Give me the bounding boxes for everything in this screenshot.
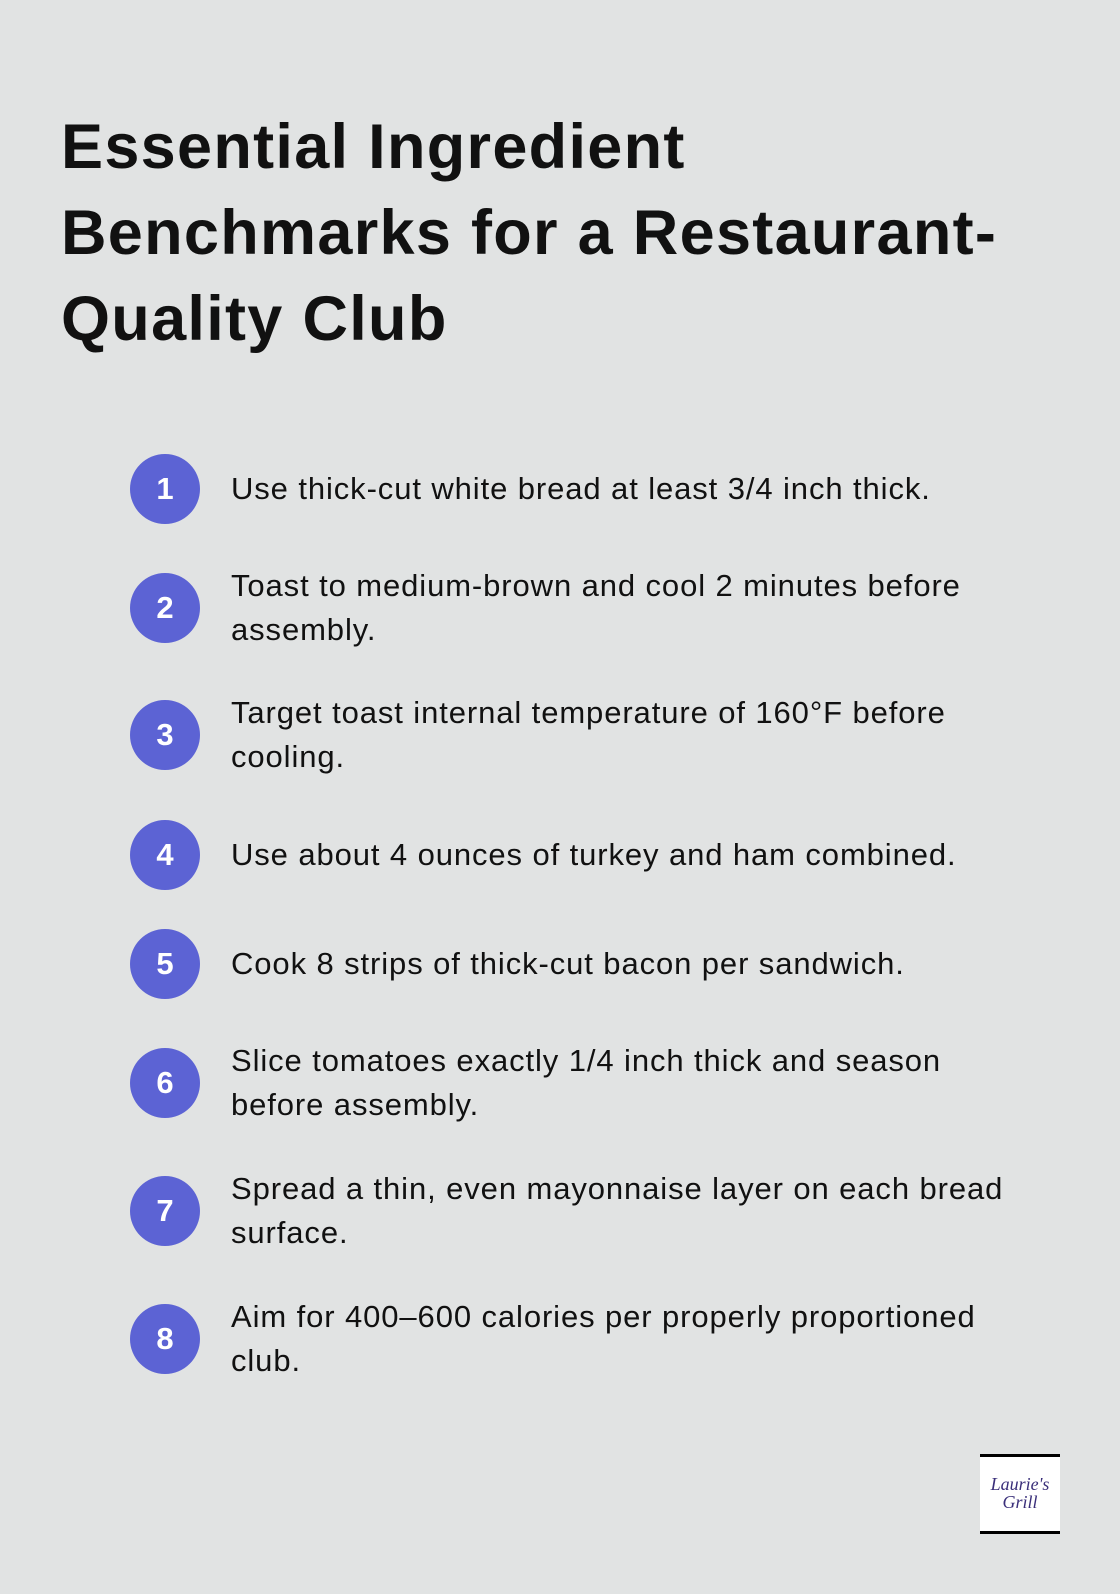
item 3: 3	[156, 717, 174, 752]
logo: Laurie's	[991, 1474, 1049, 1494]
item 4: 4	[156, 837, 174, 872]
item 8	[130, 1299, 976, 1378]
item 6: 6	[156, 1065, 174, 1100]
item 1: Use thick-cut white bread at least 3/4 inch thick.	[231, 471, 931, 506]
item 6: Slice tomatoes exactly 1/4 inch thick and season	[231, 1043, 941, 1078]
item 8: 8	[156, 1321, 174, 1356]
item 3: cooling.	[231, 739, 345, 774]
title: Benchmarks for a Restaurant-	[61, 198, 997, 268]
item 5: 5	[156, 946, 174, 981]
item 2: 2	[156, 590, 174, 625]
item 2	[130, 568, 961, 647]
item 7: Spread a thin, even mayonnaise layer on each bread	[231, 1171, 1003, 1206]
item 6: before assembly.	[231, 1087, 479, 1122]
item 5: Cook 8 strips of thick-cut bacon per sandwich.	[231, 946, 905, 981]
item 7: 7	[156, 1193, 174, 1228]
item 7: surface.	[231, 1215, 348, 1250]
title: Quality Club	[61, 284, 448, 354]
item 3: Target toast internal temperature of 160°F before	[231, 695, 946, 730]
item 8: Aim for 400–600 calories per properly proportioned	[231, 1299, 976, 1334]
item 2: assembly.	[231, 612, 376, 647]
title: Essential Ingredient	[61, 112, 686, 182]
item 8: club.	[231, 1343, 301, 1378]
item 7	[130, 1171, 1003, 1250]
item 4: Use about 4 ounces of turkey and ham combined.	[231, 837, 957, 872]
item 1	[130, 454, 931, 524]
item 2: Toast to medium-brown and cool 2 minutes before	[231, 568, 961, 603]
item 6	[130, 1043, 941, 1122]
logo	[980, 1454, 1060, 1534]
title	[61, 112, 997, 354]
logo: Grill	[1002, 1492, 1038, 1512]
item 4	[130, 820, 957, 890]
item 1: 1	[156, 471, 174, 506]
item 3	[130, 695, 946, 774]
item 5	[130, 929, 905, 999]
